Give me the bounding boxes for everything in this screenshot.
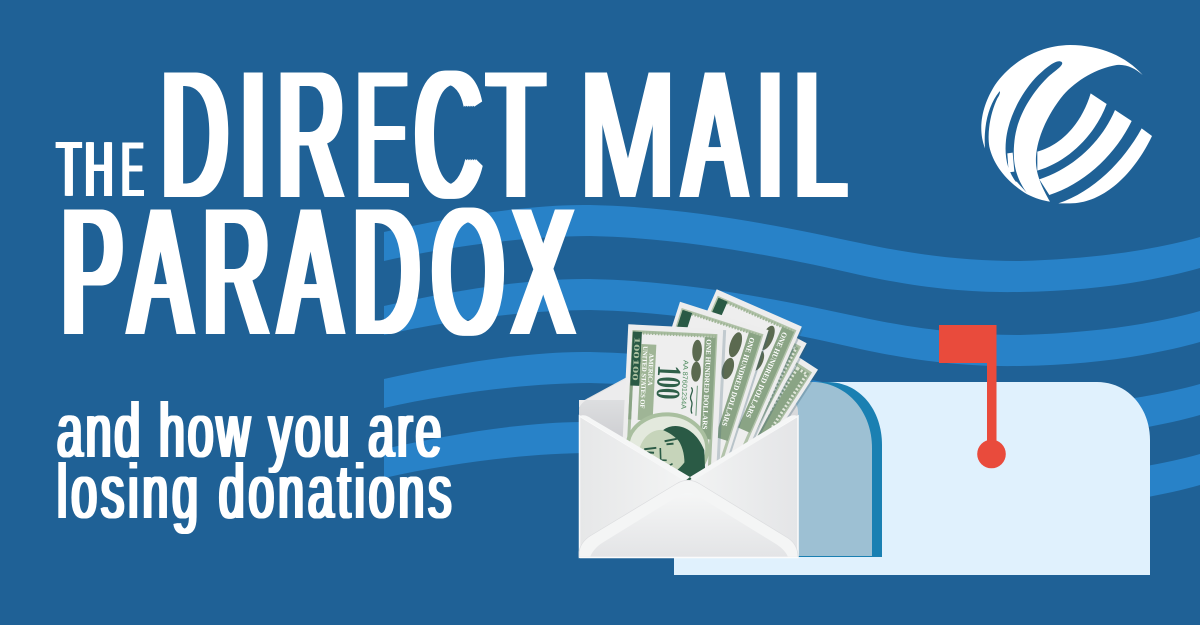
title line: DIRECT MAIL: D <box>162 34 228 236</box>
title line: DIRECT MAIL: R <box>279 34 344 236</box>
bill 3: ONE HUNDRED DOLLARS <box>744 331 789 419</box>
mailbox door edge <box>790 382 882 557</box>
mailbox body <box>674 382 1150 575</box>
title line: DIRECT MAIL: T <box>488 34 544 236</box>
title word: THE: H <box>85 127 113 213</box>
logo: striped globe <box>981 45 1152 203</box>
red flag <box>939 325 1006 468</box>
bill 5 <box>635 319 820 532</box>
title line: DIRECT MAIL: C <box>416 34 481 236</box>
bill 1: front: AMERICA <box>646 353 654 386</box>
envelope front flap right highlight <box>690 415 798 481</box>
title word: THE <box>56 127 144 213</box>
title line: DIRECT MAIL: A <box>685 34 745 236</box>
title word: THE: T <box>57 127 81 213</box>
title line: PARADOX: P <box>62 171 122 373</box>
envelope lower flap <box>579 480 798 557</box>
bill 1: front <box>620 324 726 497</box>
mailbox door <box>790 382 872 556</box>
bill 4 <box>634 300 808 514</box>
envelope front flap left highlight <box>580 415 690 481</box>
bill 2: 87601234A <box>703 353 721 389</box>
title word: THE: E <box>122 127 144 213</box>
title line: PARADOX: D <box>354 171 419 373</box>
bill 3 <box>640 289 804 503</box>
100 denomination: 100 <box>649 364 687 400</box>
serial number: AA 87601234A <box>679 360 689 410</box>
envelope front left panel <box>580 416 688 557</box>
title line: DIRECT MAIL: E <box>357 34 408 236</box>
subtitle line 1: and how you are <box>57 388 444 474</box>
bill 2 <box>619 301 770 514</box>
title line: PARADOX: A <box>130 171 190 373</box>
title line: PARADOX: A <box>280 171 340 373</box>
title line: DIRECT MAIL: I <box>758 34 783 236</box>
title line: PARADOX: O <box>433 171 503 373</box>
title line: PARADOX: X <box>513 171 573 373</box>
portrait <box>625 412 710 496</box>
title line: PARADOX <box>62 171 576 373</box>
bill 1: front: UNITED STATES OF <box>638 346 648 409</box>
envelope back flap <box>579 370 798 480</box>
title line: DIRECT MAIL: L <box>795 34 846 236</box>
title line: PARADOX: R <box>204 171 269 373</box>
mailbox base <box>674 557 882 575</box>
bill 2: ONE HUNDRED DOLLARS <box>720 336 757 427</box>
bill 1: front: 100100 <box>631 337 642 381</box>
title line: DIRECT MAIL <box>162 34 848 236</box>
subtitle line 2: losing donations <box>57 449 455 535</box>
title line: DIRECT MAIL: I <box>241 34 266 236</box>
mailbox <box>674 325 1150 575</box>
bill 1: front: ONE HUNDRED DOLLARS <box>700 339 713 430</box>
subtitle <box>57 388 455 535</box>
title: THE DIRECT MAIL PARADOX <box>56 34 848 373</box>
envelope with money <box>579 289 820 558</box>
banknotes <box>619 289 820 532</box>
title line: DIRECT MAIL: M <box>580 34 676 236</box>
envelope front right panel <box>688 416 798 557</box>
wavy postmark bands <box>384 205 1200 509</box>
